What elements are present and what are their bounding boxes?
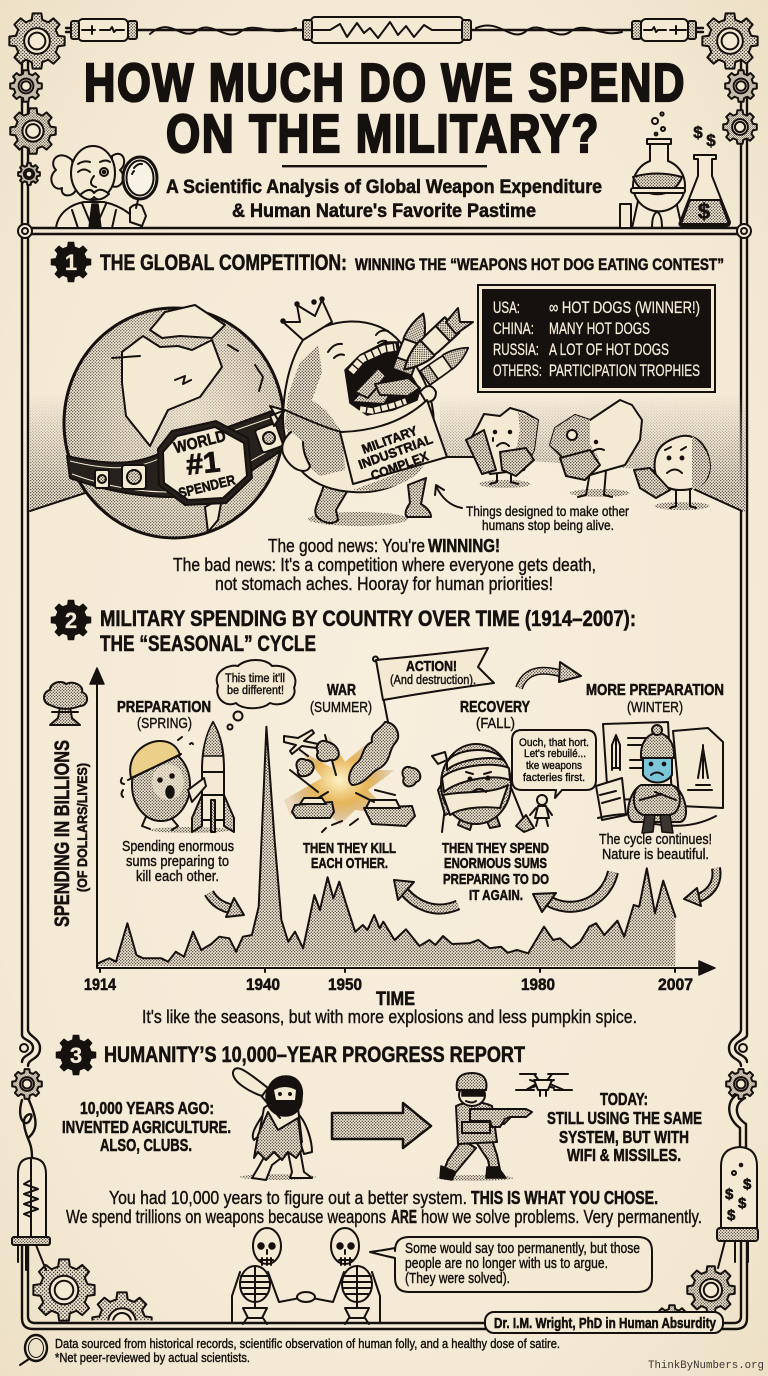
speech bubble: too permanently: Some would say too permanently, but those <box>405 1241 640 1257</box>
line chart: military spending 1914 to 2007: 1950 <box>328 975 362 994</box>
season: recovery fall: PREPARING TO DO <box>443 872 549 888</box>
icon: nervous egg with helmet and rocket <box>121 722 234 833</box>
icon: round flask and dollar beaker <box>620 112 730 228</box>
speech bubble: ouch that hurt: tke weapons <box>526 760 582 772</box>
subtitle: A Scientific Analysis of Global Weapon Expenditure <box>166 177 602 198</box>
title: ON THE MILITARY? <box>166 104 600 164</box>
speech bubble: too permanently: people are no longer with us to argue. <box>405 1256 608 1272</box>
legend box: hot dog standings <box>478 285 715 392</box>
text: 10,000 years ago: ALSO, CLUBS. <box>100 1135 192 1155</box>
panel: section 1 global competition <box>30 242 745 594</box>
icon: two skeletons shaking hands <box>232 1228 380 1324</box>
text: today: STILL USING THE SAME <box>547 1108 702 1128</box>
section 2 heading: MILITARY SPENDING BY COUNTRY OVER TIME (1914–2007): <box>100 606 636 631</box>
arrow: preparation to war <box>209 893 244 917</box>
season: more preparation winter <box>586 682 724 863</box>
icon: round flask and dollar beaker: $ <box>698 199 710 224</box>
season: more preparation winter: (WINTER) <box>627 699 683 716</box>
callout: things designed to make other humans stop being alive: humans stop being alive. <box>482 517 614 533</box>
icon: left test tube <box>12 1158 50 1270</box>
title <box>84 53 686 164</box>
legend box: hot dog standings: PARTICIPATION TROPHIES <box>549 361 700 380</box>
footer <box>20 1335 764 1372</box>
arrow: preparation sweep <box>533 872 613 912</box>
arrow: recovery back to war <box>394 880 458 909</box>
season: preparation spring: sums preparing to <box>126 853 229 870</box>
section 2 number badge: 2 <box>65 608 77 633</box>
section 3 heading: HUMANITY’S 10,000–YEAR PROGRESS REPORT <box>104 1042 525 1067</box>
legend box: hot dog standings: USA: <box>493 298 520 317</box>
season: preparation spring: (SPRING) <box>137 715 192 732</box>
caption: seasons joke: It's like the seasons, but with more explosions and less pumpkin spice. <box>142 1006 637 1027</box>
text block: 10,000 years verdict: You had 10,000 years to figure out a better system. <box>109 1187 467 1208</box>
thought bubble <box>217 660 295 730</box>
line chart: military spending 1914 to 2007: 1914 <box>84 975 116 994</box>
season: recovery fall <box>432 699 596 904</box>
icon: right test tube with dollars: $ <box>743 1176 752 1193</box>
icon: bandaged egg sweeping rubble <box>432 744 552 832</box>
icon: magnifying glass <box>20 1335 47 1365</box>
source note: *Net peer-reviewed by actual scientists. <box>55 1350 250 1365</box>
season: preparation spring: kill each other. <box>136 868 219 885</box>
icon: drone <box>516 1074 572 1096</box>
text block: good news and bad news: not stomach aches. Hooray for human priorities! <box>215 574 553 594</box>
section 3 number badge: 3 <box>70 1043 82 1068</box>
panel: section 3 progress report <box>12 1035 758 1333</box>
icon: right test tube with dollars <box>717 1147 758 1268</box>
callout: things designed to make other humans stop being alive <box>435 485 629 533</box>
icon: right test tube with dollars: $ <box>738 1195 747 1212</box>
text: today: SYSTEM, BUT WITH <box>559 1127 689 1147</box>
season: more preparation winter: Nature is beautiful. <box>602 846 709 863</box>
icon: sad small countries <box>466 400 710 508</box>
season: preparation spring <box>117 660 295 885</box>
text: today <box>547 1089 702 1165</box>
icon: mushroom cloud <box>44 682 87 725</box>
halftone landscape <box>29 398 745 526</box>
legend box: hot dog standings: CHINA: <box>493 319 534 338</box>
speech bubble: too permanently: (They were solved). <box>405 1271 510 1287</box>
text: today: WIFI & MISSILES. <box>567 1145 681 1165</box>
season: recovery fall: RECOVERY <box>460 699 530 716</box>
section 1 heading <box>100 250 724 275</box>
source note <box>55 1336 560 1365</box>
speech bubble: ouch that hurt: Ouch, that hort. <box>519 737 589 749</box>
section 1 number badge <box>51 242 91 282</box>
icon: round flask and dollar beaker: $ <box>706 131 716 150</box>
season: war summer <box>284 648 494 872</box>
line chart: military spending 1914 to 2007: TIME <box>376 989 415 1010</box>
legend box: hot dog standings: RUSSIA: <box>493 340 539 359</box>
arrow: progress arrow <box>332 1103 431 1148</box>
line chart: military spending 1914 to 2007: SPENDING IN BILLIONS <box>51 740 74 927</box>
legend box: hot dog standings: ∞ HOT DOGS (WINNER!) <box>549 298 700 317</box>
line chart: military spending 1914 to 2007: (OF DOLLARS/LIVES) <box>74 763 90 892</box>
flag: action and destruction: (And destruction). <box>390 673 476 687</box>
season: preparation spring: Spending enormous <box>122 838 234 855</box>
arrow: continuing cycle <box>684 868 716 906</box>
top tubes <box>66 17 703 43</box>
icon: explosion with tanks and plane <box>284 722 420 832</box>
season: war summer: EACH OTHER. <box>311 856 388 872</box>
icon: egg glutton eating missiles in bib and crown <box>270 297 473 523</box>
season: more preparation winter: MORE PREPARATION <box>586 682 724 699</box>
icon: globe with championship belt: SPENDER <box>177 471 237 501</box>
thought bubble: This time it'll <box>225 673 285 685</box>
callout: things designed to make other humans stop being alive: Things designed to make other <box>466 503 629 519</box>
season: recovery fall: IT AGAIN. <box>469 888 523 904</box>
icon: professor with magnifying glass <box>51 146 157 228</box>
speech bubble: ouch that hurt: Let's rebuilé... <box>524 748 586 760</box>
panel: section 2 spending cycle <box>44 600 724 1027</box>
section 3 number badge <box>56 1035 96 1075</box>
text: 10,000 years ago: 10,000 YEARS AGO: <box>80 1098 214 1118</box>
season: war summer: THEN THEY KILL <box>303 841 396 857</box>
icon: egg glutton eating missiles in bib and crown: COMPLEX <box>369 448 430 483</box>
icon: caveman with club <box>233 1068 316 1180</box>
text block: 10,000 years verdict: how we solve problems. Very permanently. <box>421 1206 702 1227</box>
icon: right test tube with dollars: $ <box>727 1207 736 1224</box>
text: 10,000 years ago <box>62 1098 231 1155</box>
section 2 heading <box>100 606 636 656</box>
text block: 10,000 years verdict: We spend trillions on weapons because weapons <box>66 1206 386 1227</box>
subtitle: & Human Nature's Favorite Pastime <box>232 201 536 222</box>
text block: good news and bad news: The bad news: It's a competition where everyone gets death, <box>173 555 596 575</box>
text block: good news and bad news <box>173 536 596 594</box>
season: recovery fall: THEN THEY SPEND <box>442 841 549 857</box>
text block: 10,000 years verdict <box>66 1187 702 1227</box>
text block: 10,000 years verdict: THIS IS WHAT YOU CHOSE. <box>471 1187 658 1208</box>
text block: 10,000 years verdict: ARE <box>391 1206 417 1227</box>
line chart: military spending 1914 to 2007 <box>51 668 715 1010</box>
season: preparation spring: PREPARATION <box>117 699 211 716</box>
section 2 number badge <box>51 600 91 640</box>
section 1 number badge: 1 <box>65 250 77 275</box>
speech bubble: too permanently <box>370 1237 652 1292</box>
thought bubble: be different! <box>227 685 284 697</box>
icon: globe with championship belt: #1 <box>184 446 222 482</box>
line chart: military spending 1914 to 2007: 1940 <box>246 975 280 994</box>
icon: soldier with rifle <box>437 1073 532 1181</box>
source note: Data sourced from historical records, scientific observation of human folly, and a healthy dose of satire. <box>55 1336 560 1351</box>
speech bubble: ouch that hurt <box>512 730 596 798</box>
legend box: hot dog standings: MANY HOT DOGS <box>549 319 650 338</box>
watermark: ThinkByNumbers.org <box>648 1360 764 1372</box>
icon: egg glutton eating missiles in bib and crown: INDUSTRIAL <box>356 431 435 472</box>
icon: freezing egg with blueprints <box>596 722 723 833</box>
icon: globe with championship belt: WORLD <box>172 428 228 457</box>
season: war summer: (SUMMER) <box>310 699 372 716</box>
icon: right test tube with dollars: $ <box>725 1186 734 1203</box>
panel: header <box>51 53 730 228</box>
season: war summer: WAR <box>327 682 356 699</box>
icon: egg glutton eating missiles in bib and crown: MILITARY <box>360 423 420 457</box>
text block: good news and bad news: The good news: You're <box>268 536 425 556</box>
author plate <box>485 1312 723 1333</box>
text block: good news and bad news: WINNING! <box>428 536 500 556</box>
season: recovery fall: (FALL) <box>476 715 515 732</box>
season: more preparation winter: The cycle continues! <box>599 831 712 848</box>
legend box: hot dog standings: OTHERS: <box>493 361 542 380</box>
line chart: military spending 1914 to 2007: 1980 <box>521 975 555 994</box>
legend box: hot dog standings: A LOT OF HOT DOGS <box>549 340 669 359</box>
season: recovery fall: ENORMOUS SUMS <box>444 856 547 872</box>
arrow: top cycle arrow <box>519 662 581 688</box>
text: today: TODAY: <box>600 1089 648 1109</box>
flag: action and destruction <box>373 648 494 722</box>
speech bubble: ouch that hurt: facteries first. <box>523 772 585 784</box>
text: 10,000 years ago: INVENTED AGRICULTURE. <box>62 1117 231 1137</box>
subtitle <box>166 177 602 222</box>
icon: globe with championship belt <box>64 305 288 538</box>
icon: round flask and dollar beaker: $ <box>693 123 703 142</box>
section 1 heading: THE GLOBAL COMPETITION: <box>100 250 347 275</box>
flag: action and destruction: ACTION! <box>406 658 457 675</box>
line chart: military spending 1914 to 2007: 2007 <box>658 975 693 994</box>
section 2 heading: THE “SEASONAL” CYCLE <box>100 631 316 656</box>
